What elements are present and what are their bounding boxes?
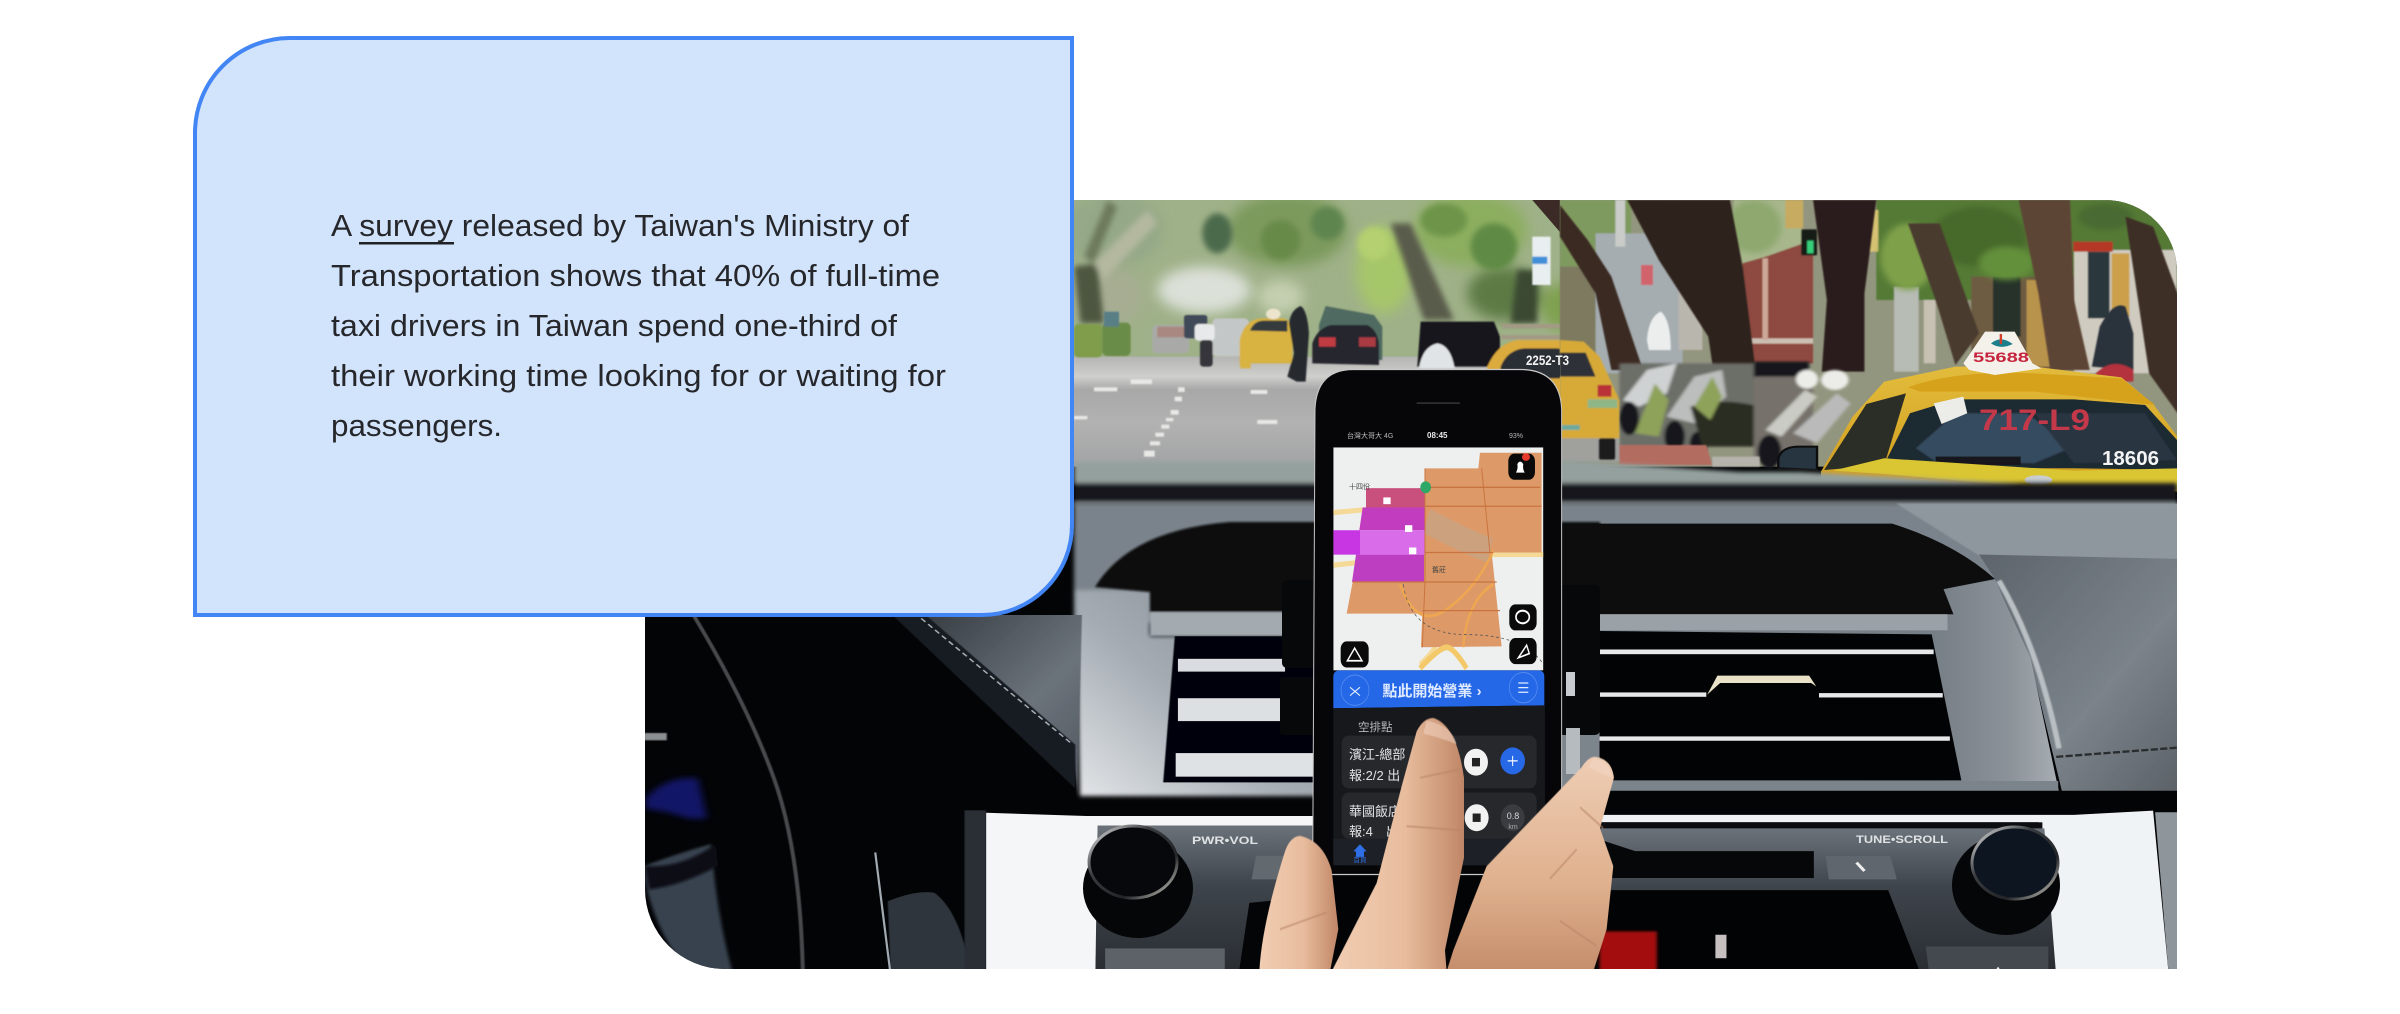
scooter rider xyxy=(1195,324,1215,341)
map screen xyxy=(1333,447,1543,670)
dark list xyxy=(1333,705,1545,865)
white-shirt pedestrian xyxy=(1647,312,1671,350)
street scene, right: trees, scooters and parked taxis xyxy=(1560,200,2181,492)
lower button xyxy=(1926,946,2048,977)
curb xyxy=(1619,445,1712,465)
phone screen text: 報:2/2 出 xyxy=(1349,768,1400,783)
console labels: PWR•VOL xyxy=(1192,835,1258,847)
phone screen text: 93% xyxy=(1509,433,1523,440)
phone xyxy=(1313,369,1562,875)
center taxi xyxy=(1560,340,1619,438)
silver car 2 xyxy=(1212,318,1249,357)
taxi plates and roof sign xyxy=(1526,349,2159,470)
road markings xyxy=(1074,379,1277,457)
survey text block: their working time looking for or waiting for xyxy=(331,358,946,393)
windshield lower edge xyxy=(1074,460,2177,505)
phone screen text: 舊莊 xyxy=(1432,565,1446,574)
person by door xyxy=(2092,305,2133,370)
dashboard panels xyxy=(644,503,2180,977)
pedestrian xyxy=(1287,306,1309,382)
console labels: TUNE•SCROLL xyxy=(1856,834,1948,846)
phone screen text: km xyxy=(1508,824,1518,831)
phone screen text: 華國飯店 xyxy=(1349,804,1401,819)
phone screen text: 台灣大哥大 4G xyxy=(1347,431,1393,440)
trunk top right xyxy=(1532,200,1560,232)
building and brick wall xyxy=(1742,240,1813,363)
silver console right xyxy=(1600,811,2169,977)
CD slot xyxy=(1603,841,1814,878)
photo: taxi dashboard with phone app xyxy=(644,193,2181,977)
phone screen text: 0.8 xyxy=(1507,811,1519,821)
phone screen text: 點此開始營業 › xyxy=(1382,682,1482,700)
phone screen text: 空排點 xyxy=(1358,720,1393,734)
green truck xyxy=(1319,306,1382,360)
silver car xyxy=(1152,325,1189,353)
steering wheel xyxy=(694,617,803,977)
taxi rack xyxy=(1501,324,1594,339)
white-shirt person xyxy=(1419,343,1455,368)
survey text block: A survey released by Taiwan's Ministry of xyxy=(331,208,909,243)
survey text block: Transportation shows that 40% of full-time xyxy=(331,258,940,293)
right taxi xyxy=(1778,332,2180,492)
pole xyxy=(1894,287,1919,372)
phone body xyxy=(1313,369,1562,875)
phone button xyxy=(1826,856,1897,879)
signal and signs xyxy=(1785,200,1803,228)
console button xyxy=(1252,856,1316,879)
phone screen text: 08:45 xyxy=(1427,431,1448,440)
phone screen text: 報:4 出 xyxy=(1349,824,1399,839)
blue street sign xyxy=(1532,237,1551,285)
phone screen text: 濱江-總部 xyxy=(1349,747,1405,762)
phone mount arms xyxy=(1280,580,1600,774)
phone screen text xyxy=(1347,431,1523,864)
console knob left xyxy=(1083,826,1193,938)
right vent xyxy=(1600,631,1961,780)
scooters xyxy=(1619,363,1758,447)
leather panel xyxy=(894,615,1082,795)
dark car far xyxy=(1184,315,1207,338)
dash hood left xyxy=(1095,522,1600,612)
dash right side: hood, vent, console xyxy=(1560,503,2180,977)
blue start bar xyxy=(1333,670,1544,708)
thumb xyxy=(1259,836,1338,971)
taxi plates and roof sign: 2252-T3 xyxy=(1526,352,1569,368)
yellow car xyxy=(1240,318,1292,368)
screen corner xyxy=(1238,896,1316,977)
survey text block xyxy=(331,208,946,443)
panel: survey callout xyxy=(195,38,1072,615)
index finger xyxy=(1332,718,1464,971)
survey text block: taxi drivers in Taiwan spend one-third of xyxy=(331,308,897,343)
lower button xyxy=(1105,948,1225,977)
taxi plates and roof sign: 55688 xyxy=(1973,349,2029,365)
dash left side: wheel, leather, left vent, console xyxy=(644,615,1316,977)
hand touching phone xyxy=(1259,718,1614,971)
silver console left xyxy=(986,813,1316,977)
left vent xyxy=(1163,636,1316,782)
central screen xyxy=(1600,890,1922,977)
taxi plates and roof sign: 18606 xyxy=(2102,448,2159,470)
bushes xyxy=(1074,324,1102,357)
console labels xyxy=(1192,834,1948,847)
survey text block: passengers. xyxy=(331,408,502,443)
dark sedan xyxy=(1312,325,1379,365)
street scene, left: hazy tree-lined road xyxy=(1074,200,1560,467)
console knob right xyxy=(1952,827,2060,935)
black open SUV xyxy=(1417,322,1500,367)
ring finger xyxy=(1447,757,1614,971)
trunks xyxy=(1560,205,1643,370)
phone screen text: 十四份 xyxy=(1349,482,1370,491)
upper dash gray band xyxy=(1074,503,2177,623)
phone screen text: 首頁 xyxy=(1354,855,1367,864)
fingertip nails xyxy=(1423,721,1457,744)
left vent housing wall xyxy=(1076,590,1320,796)
taxi plates and roof sign: 717-L9 xyxy=(1979,404,2090,437)
